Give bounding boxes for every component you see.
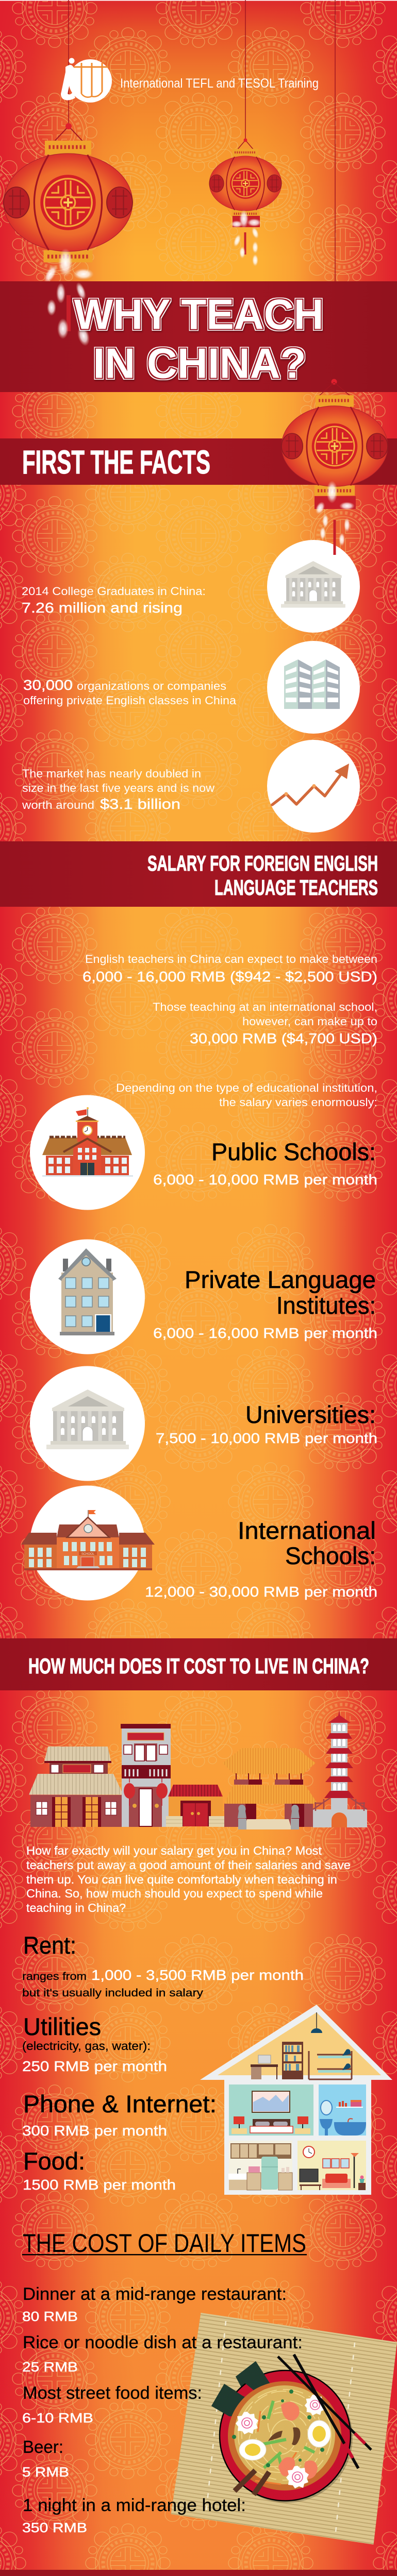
heading band: cost of living [0, 1638, 397, 1690]
cost intro text [26, 1844, 351, 1914]
item: hotel: 350 RMB [22, 2520, 87, 2535]
fact: market size: The market has nearly doubled in [22, 767, 201, 780]
item: hotel [22, 2496, 246, 2535]
heading band: first the facts: FIRST THE FACTS [22, 444, 210, 481]
cost intro text: China. So, how much should you expect to spend while [26, 1887, 323, 1900]
item: beer: 5 RMB [22, 2464, 69, 2480]
heading band: where to teach [0, 2570, 397, 2576]
private institutes salary: Private Language [185, 1266, 376, 1293]
panel: salary [0, 841, 397, 1600]
salary overview text: the salary varies enormously: [219, 1096, 377, 1109]
salary overview text: Depending on the type of educational institution, [116, 1081, 377, 1094]
public schools salary: Public Schools: [211, 1138, 376, 1165]
building: small red door house [166, 1785, 224, 1827]
item: rice or noodle: Rice or noodle dish at a restaurant: [23, 2333, 303, 2352]
panel: cost of daily items [22, 2229, 397, 2545]
item: street food: Most street food items: [23, 2383, 202, 2403]
cost intro text: them up. You can live quite comfortably when teaching in [26, 1873, 337, 1886]
title [74, 291, 324, 387]
utilities: 250 RMB per month [22, 2058, 167, 2074]
icon: private institute house [30, 1240, 145, 1354]
logo mark [61, 58, 112, 103]
fact: college graduates: 2014 College Graduates in China: [22, 585, 206, 598]
fact: college graduates [22, 585, 206, 616]
rent: Rent: [23, 1931, 76, 1959]
fact: organizations: offering private English classes in China [23, 694, 237, 707]
illustration: house cross-section [200, 2005, 392, 2195]
universities salary [156, 1401, 377, 1446]
heading band: first the facts [0, 438, 397, 485]
utilities: (electricity, gas, water): [22, 2039, 151, 2053]
hanging lanterns [4, 0, 335, 285]
cost intro text: How far exactly will your salary get you in China? Most [26, 1844, 322, 1857]
building: temple [223, 1748, 318, 1829]
item: dinner [22, 2284, 287, 2324]
fact: college graduates: 7.26 million and rising [22, 600, 183, 616]
panel: first the facts [0, 382, 397, 833]
building: left tiled house [29, 1747, 123, 1827]
salary overview text: 30,000 RMB ($4,700 USD) [190, 1030, 377, 1046]
utilities: Utilities [23, 2013, 101, 2040]
food: 1500 RMB per month [23, 2177, 176, 2193]
chopsticks [278, 2354, 371, 2468]
salary overview text: 6,000 - 16,000 RMB ($942 - $2,500 USD) [82, 969, 377, 985]
logo: ITTT [61, 58, 319, 103]
fact: market size: size in the last five years and is now [22, 782, 214, 794]
title: IN CHINA? [93, 339, 306, 387]
building: pagoda [313, 1710, 367, 1827]
fact: organizations: organizations or companies [77, 680, 226, 692]
item: beer: Beer: [23, 2437, 63, 2457]
rent: ranges from [22, 1971, 87, 1982]
attic furniture [251, 2012, 352, 2079]
icon: rising arrow chart in circle [267, 740, 360, 833]
phone and internet: Phone & Internet: [23, 2090, 217, 2117]
fact: organizations [23, 677, 237, 707]
cost intro text: teaching in China? [26, 1901, 126, 1914]
building: tall gate house [121, 1724, 171, 1827]
item: rice or noodle: 25 RMB [22, 2359, 78, 2375]
logo text: International TEFL and TESOL Training [120, 76, 319, 91]
icon: university in circle [267, 520, 360, 633]
title: WHY TEACH [74, 291, 324, 338]
panel: cost of living [0, 1638, 397, 2195]
item: street food: 6-10 RMB [22, 2410, 93, 2426]
universities salary: Universities: [245, 1401, 376, 1428]
illustration: chinese street buildings [29, 1710, 367, 1829]
salary overview text: however, can make up to [242, 1015, 377, 1028]
international schools salary [145, 1517, 377, 1600]
food [23, 2147, 176, 2193]
phone and internet: 300 RMB per month [22, 2123, 167, 2139]
icon: office buildings in circle [267, 641, 360, 734]
icon: public school [30, 1095, 145, 1210]
panel: where to teach [0, 2570, 397, 2576]
private institutes salary: Institutes: [276, 1292, 376, 1319]
heading band: salary [0, 841, 397, 907]
utilities [22, 2013, 167, 2074]
international schools salary: 12,000 - 30,000 RMB per month [145, 1584, 377, 1600]
universities salary: 7,500 - 10,000 RMB per month [156, 1430, 377, 1446]
small lantern centre [209, 138, 282, 266]
kitchen [228, 2143, 292, 2190]
food: Food: [23, 2147, 85, 2175]
title band [0, 281, 397, 392]
item: beer [22, 2437, 69, 2480]
icon: international school: SCHOOL [81, 1553, 95, 1556]
cost intro text: teachers put away a good amount of their salaries and save [26, 1858, 351, 1872]
public schools salary [153, 1138, 377, 1188]
private institutes salary: 6,000 - 16,000 RMB per month [153, 1325, 377, 1341]
living room [300, 2146, 366, 2190]
icon: university [30, 1366, 145, 1481]
item: rice or noodle [22, 2333, 303, 2375]
bathroom [320, 2100, 366, 2136]
lantern tassel over title band [47, 281, 92, 347]
item: hotel: 1 night in a mid-range hotel: [23, 2496, 246, 2515]
salary overview text [82, 953, 377, 1109]
salary overview text: English teachers in China can expect to make between [85, 953, 377, 965]
lantern right [282, 382, 388, 546]
rent: but it's usually included in salary [22, 1987, 204, 1999]
lantern strings [69, 0, 335, 281]
rent [22, 1931, 304, 1999]
item: street food [22, 2383, 202, 2426]
fact: market size [22, 767, 214, 812]
icon: international school [21, 1486, 155, 1600]
item: dinner: 80 RMB [22, 2309, 78, 2324]
rent: 1,000 - 3,500 RMB per month [91, 1967, 304, 1983]
international schools salary: International [238, 1517, 376, 1544]
item: dinner: Dinner at a mid-range restaurant: [23, 2284, 287, 2304]
phone and internet [22, 2090, 217, 2139]
public schools salary: 6,000 - 10,000 RMB per month [153, 1172, 377, 1188]
fact: organizations: 30,000 [23, 677, 73, 693]
fact: market size: $3.1 billion [100, 796, 180, 812]
large lantern left [4, 123, 133, 285]
heading: cost of daily items: THE COST OF DAILY ITEMS [23, 2229, 306, 2258]
salary overview text: Those teaching at an international school, [153, 1001, 377, 1013]
fact: market size: worth around [22, 799, 94, 811]
private institutes salary [153, 1266, 377, 1341]
international schools salary: Schools: [285, 1542, 376, 1569]
bedroom [231, 2091, 310, 2134]
illustration: noodle bowl on bamboo mat [171, 2313, 397, 2545]
